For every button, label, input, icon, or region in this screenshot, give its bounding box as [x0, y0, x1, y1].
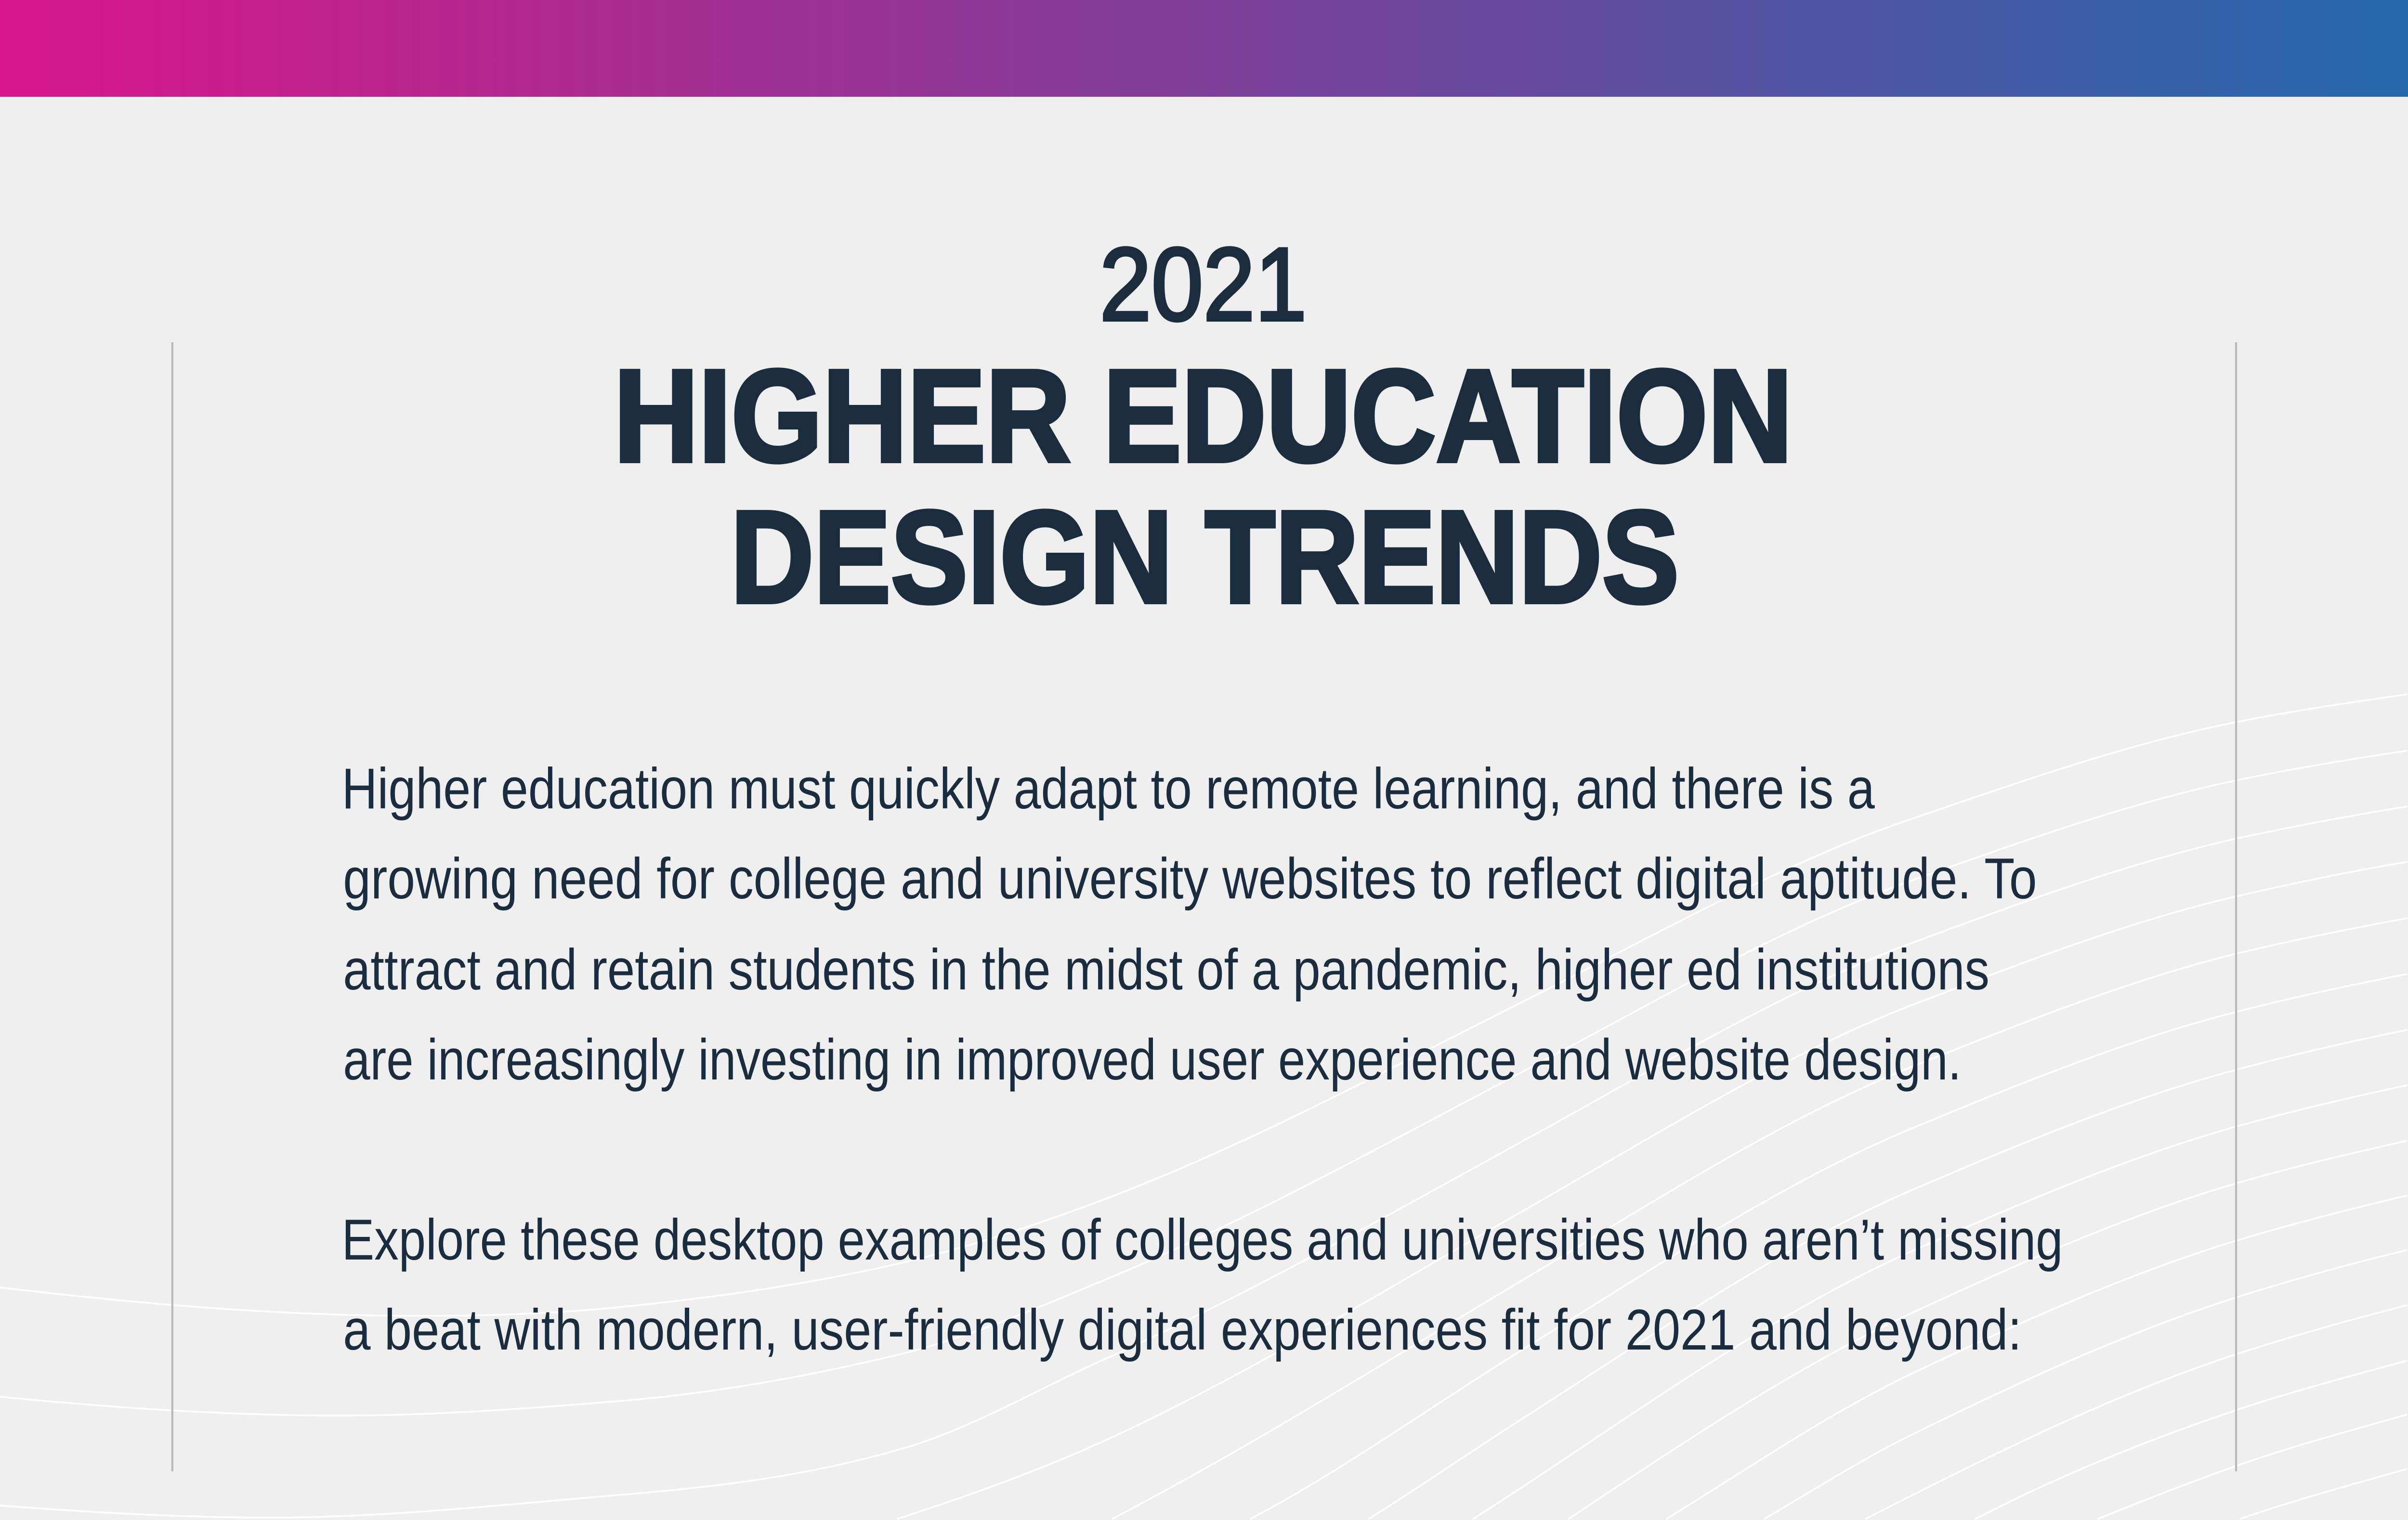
explore paragraph: Explore these desktop examples of colleges and universities who aren’t missing	[342, 1208, 2063, 1272]
background wave lines	[0, 694, 2407, 1519]
intro paragraph: growing need for college and university websites to reflect digital aptitude. To	[343, 846, 2037, 911]
right vertical rule	[2235, 342, 2237, 1471]
intro paragraph: attract and retain students in the midst of a pandemic, higher ed institutions	[343, 937, 1989, 1002]
explore paragraph	[342, 1208, 2063, 1362]
title year: 2021	[1099, 226, 1307, 342]
intro paragraph	[342, 756, 2037, 1092]
intro paragraph: are increasingly investing in improved user experience and website design.	[343, 1027, 1962, 1092]
title	[614, 226, 1793, 630]
top gradient bar	[0, 0, 2408, 97]
explore paragraph: a beat with modern, user-friendly digital experiences fit for 2021 and beyond:	[343, 1298, 2022, 1362]
title line 2: DESIGN TRENDS	[731, 483, 1679, 630]
title line 1: HIGHER EDUCATION	[614, 342, 1793, 489]
left vertical rule	[171, 342, 173, 1471]
intro paragraph: Higher education must quickly adapt to remote learning, and there is a	[342, 756, 1875, 821]
